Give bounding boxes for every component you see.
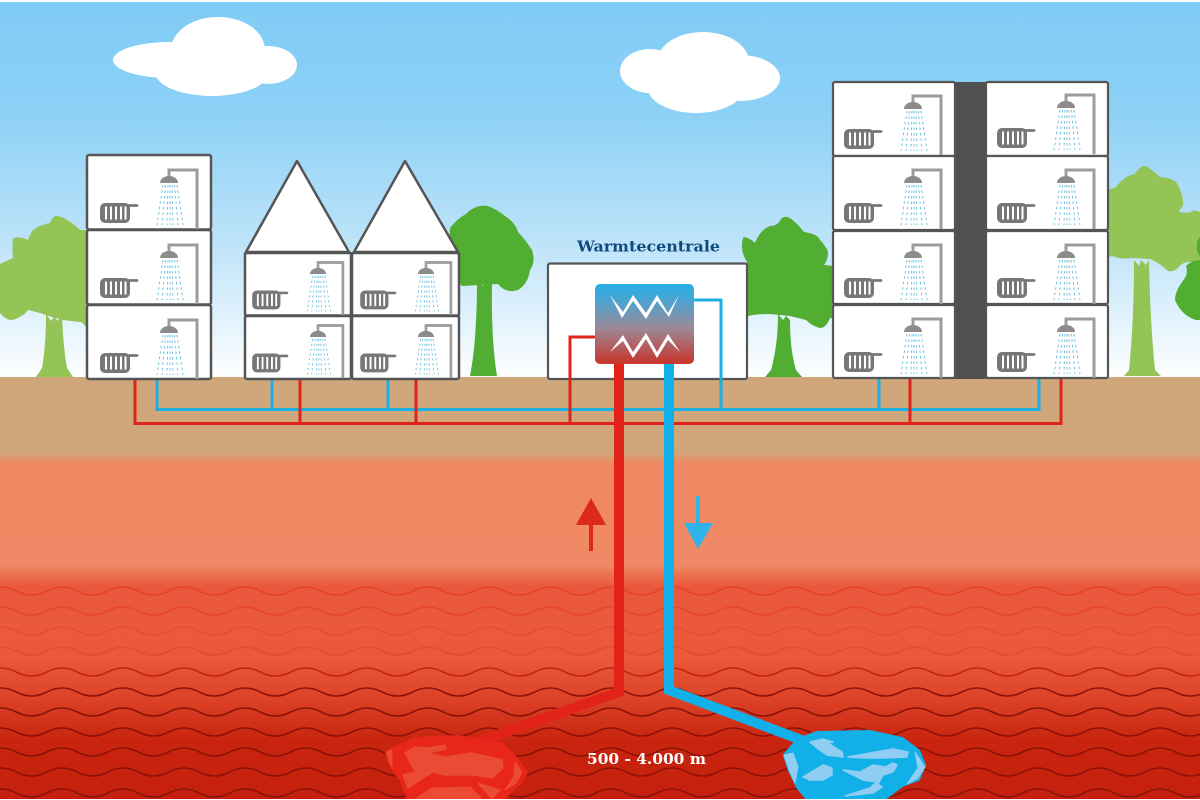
bottom coil [610,333,680,358]
bottom edge [0,799,1200,800]
house two [352,161,459,379]
main blue well pipe [669,363,812,744]
apartment block [833,82,1108,379]
title: Warmtecentrale: Warmtecentrale [576,238,720,256]
blue return network [157,300,1039,410]
cloud right [620,32,780,113]
ground layers [0,377,1200,800]
plant feed pipes [570,300,721,423]
tree middle-right [742,217,835,377]
main red well pipe [472,363,619,744]
left column rooms [833,82,1108,378]
hot reservoir [387,737,526,799]
heating plant building [548,264,747,379]
tree left [0,216,90,377]
tree right light [1105,166,1200,376]
cold reservoir [784,732,925,799]
stair core [954,82,987,379]
arrow up [576,498,606,551]
left tower building [87,155,211,379]
depth label: 500 - 4.000 m [587,750,706,768]
fixtures [844,96,941,155]
house one [245,161,351,379]
cloud left [113,17,297,96]
top edge [0,0,1200,2]
sky background [0,0,1200,380]
heat exchanger [595,284,694,364]
top coil [610,295,679,319]
underground distribution pipes [135,300,1061,424]
red supply network [135,337,1061,424]
arrow down [684,496,713,549]
tree right dark [1175,237,1200,320]
tree middle-left [450,206,534,376]
rock wave lines [0,587,1200,797]
